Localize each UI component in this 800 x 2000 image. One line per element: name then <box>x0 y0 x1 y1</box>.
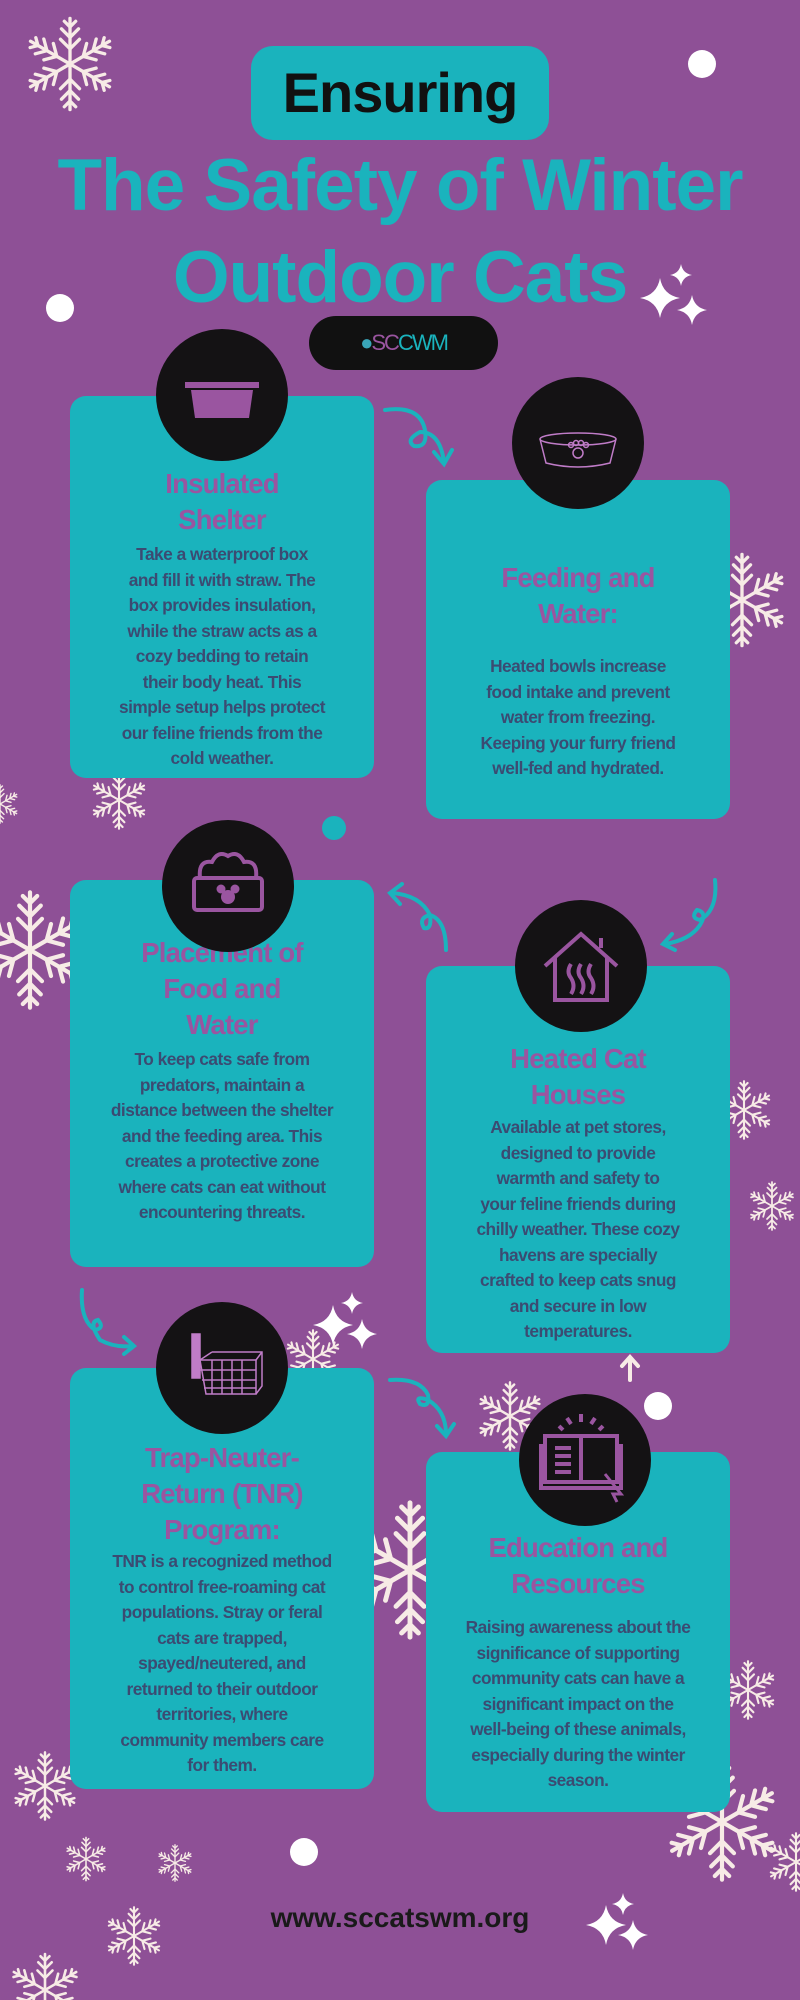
text: spayed/neutered, and <box>138 1653 306 1673</box>
text: food intake and prevent <box>486 682 670 702</box>
title: The Safety of Winter <box>57 145 743 226</box>
text: community cats can have a <box>472 1668 684 1688</box>
text: chilly weather. These cozy <box>476 1219 680 1239</box>
text: cats are trapped, <box>157 1628 287 1648</box>
arrow small up <box>622 1357 638 1380</box>
text: and secure in low <box>510 1296 646 1316</box>
text: predators, maintain a <box>140 1074 304 1094</box>
text: box provides insulation, <box>129 595 315 615</box>
text: significance of supporting <box>476 1642 680 1662</box>
icon: trap cage <box>156 1302 288 1434</box>
arrow 1 <box>385 409 452 464</box>
text: for them. <box>187 1755 257 1775</box>
panel: education and resources <box>426 1452 730 1812</box>
text: community members care <box>120 1730 324 1750</box>
text: to control free-roaming cat <box>119 1576 325 1596</box>
panel: placement of food and water <box>70 880 374 1267</box>
text: cold weather. <box>170 748 273 768</box>
heading <box>488 1532 668 1599</box>
heading: Feeding and <box>501 562 655 593</box>
text: populations. Stray or feral <box>122 1602 322 1622</box>
text: territories, where <box>156 1704 288 1724</box>
logo pill: ●SCCWM <box>360 330 447 355</box>
text: their body heat. This <box>143 672 301 692</box>
text: cozy bedding to retain <box>136 646 308 666</box>
heading <box>501 562 655 629</box>
text: and fill it with straw. The <box>129 570 315 590</box>
panel: TNR program <box>70 1368 374 1789</box>
text: our feline friends from the <box>122 722 322 742</box>
text: Raising awareness about the <box>466 1617 690 1637</box>
icon: heated house <box>515 900 647 1032</box>
text: distance between the shelter <box>111 1100 333 1120</box>
panel: heated cat houses <box>426 966 730 1353</box>
text: Keeping your furry friend <box>481 732 675 752</box>
text: temperatures. <box>524 1321 632 1341</box>
text: To keep cats safe from <box>134 1049 310 1069</box>
arrow 4 <box>82 1290 134 1354</box>
text: encountering threats. <box>139 1202 305 1222</box>
text <box>476 1117 680 1341</box>
text: crafted to keep cats snug <box>480 1270 676 1290</box>
heading: Food and <box>163 973 281 1004</box>
text: your feline friends during <box>480 1194 676 1214</box>
heading: Program: <box>164 1514 280 1545</box>
heading: Water: <box>538 598 618 629</box>
text: while the straw acts as a <box>127 620 317 640</box>
text: especially during the winter <box>471 1744 685 1764</box>
text <box>111 1049 334 1222</box>
panel: feeding and water <box>426 480 730 819</box>
text <box>466 1617 690 1790</box>
text: well-fed and hydrated. <box>492 758 664 778</box>
text: creates a protective zone <box>125 1151 319 1171</box>
title badge: Ensuring <box>251 46 549 140</box>
heading <box>141 937 304 1040</box>
text: designed to provide <box>501 1142 655 1162</box>
text: Heated bowls increase <box>490 656 666 676</box>
arrow 3 <box>663 880 715 950</box>
title <box>57 145 743 318</box>
icon: bowl <box>512 377 644 509</box>
heading: Water <box>186 1009 258 1040</box>
heading <box>510 1043 646 1110</box>
heading: Houses <box>531 1079 625 1110</box>
heading <box>141 1442 303 1545</box>
arrow 2 <box>390 884 446 950</box>
text: where cats can eat without <box>119 1176 325 1196</box>
footer url: www.sccatswm.org <box>271 1902 529 1933</box>
text: season. <box>548 1770 608 1790</box>
title badge: Ensuring: Ensuring <box>283 61 517 124</box>
text: well-being of these animals, <box>470 1719 686 1739</box>
text: havens are specially <box>499 1244 657 1264</box>
logo pill <box>309 316 498 370</box>
text: significant impact on the <box>482 1694 674 1714</box>
text <box>481 656 675 778</box>
heading: Heated Cat <box>510 1043 646 1074</box>
heading: Shelter <box>178 504 266 535</box>
text <box>112 1551 332 1775</box>
icon: shelter box <box>156 329 288 461</box>
text: and the feeding area. This <box>122 1126 322 1146</box>
heading: Return (TNR) <box>141 1478 303 1509</box>
text: Available at pet stores, <box>490 1117 666 1137</box>
text: warmth and safety to <box>497 1168 659 1188</box>
arrow 5 <box>390 1380 454 1436</box>
panel: insulated shelter <box>70 396 374 778</box>
heading <box>165 468 279 535</box>
heading: Resources <box>511 1568 645 1599</box>
icon: book <box>519 1394 651 1526</box>
text: simple setup helps protect <box>119 697 325 717</box>
text: TNR is a recognized method <box>112 1551 332 1571</box>
heading: Insulated <box>165 468 279 499</box>
heading: Education and <box>488 1532 668 1563</box>
text <box>119 544 326 768</box>
icon: food bowl <box>162 820 294 952</box>
heading: Placement of <box>141 937 303 968</box>
heading: Trap-Neuter- <box>145 1442 299 1473</box>
title: Outdoor Cats <box>173 237 627 318</box>
text: Take a waterproof box <box>136 544 308 564</box>
text: returned to their outdoor <box>126 1678 318 1698</box>
text: water from freezing. <box>501 707 655 727</box>
